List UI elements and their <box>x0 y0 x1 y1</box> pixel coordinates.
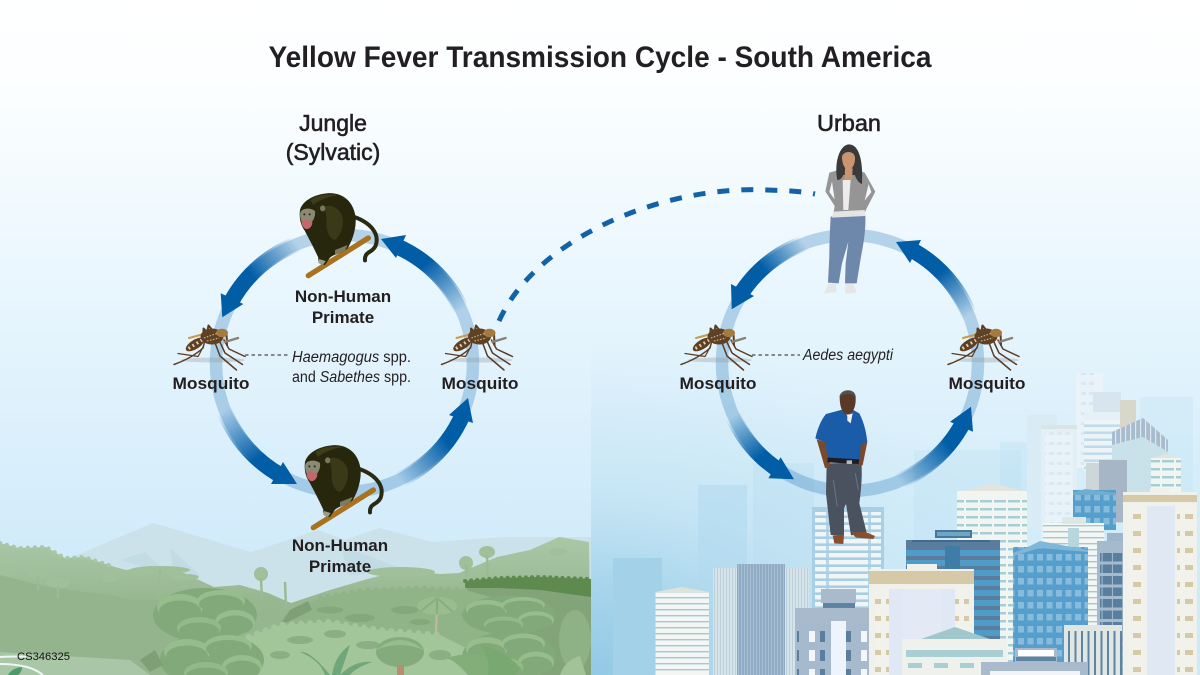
palm <box>417 597 457 633</box>
arrow: man to right mosquito <box>875 407 973 488</box>
front grey roof building <box>981 648 1088 675</box>
foreground fern leaves <box>300 645 586 675</box>
chart: urban transmission ring <box>722 235 978 491</box>
title: Yellow Fever Transmission Cycle - South America <box>268 41 932 74</box>
white mid-rise <box>1043 517 1104 643</box>
light blue tower behind man <box>812 507 884 647</box>
arrow: right mosquito to primate <box>381 235 470 333</box>
icon: man <box>815 390 875 544</box>
white teal-striped building <box>957 483 1027 675</box>
label: lower non-human primate: Primate <box>309 557 371 576</box>
icon: mosquito, jungle right <box>442 326 512 370</box>
illustration: city skyline <box>613 373 1197 675</box>
low building with teal roof <box>902 627 1007 675</box>
cream corner tower <box>1123 488 1197 675</box>
credit: figure code: CS346325 <box>17 651 70 663</box>
pale towers <box>1027 373 1136 545</box>
ground and stream <box>0 652 150 675</box>
panel: background sky, jungle half <box>0 0 591 675</box>
blue glass tower <box>1013 541 1088 675</box>
illustration: jungle landscape <box>0 523 591 675</box>
heading: jungle cycle: (Sylvatic) <box>286 139 380 165</box>
heading: urban cycle: Urban <box>817 110 881 136</box>
low vertical-striped building <box>1064 625 1122 675</box>
faint distant buildings <box>613 397 1193 675</box>
arrow: woman to left mosquito <box>731 236 835 309</box>
label: upper non-human primate: Non-Human <box>295 287 391 306</box>
arrow: dashed spillover path from jungle to urban <box>499 190 815 321</box>
dark canopy band <box>465 577 591 675</box>
label: lower non-human primate: Non-Human <box>292 536 388 555</box>
chart: jungle transmission ring <box>216 235 473 492</box>
arrow: left mosquito to lower primate <box>217 385 297 484</box>
grey tower with dark windows <box>1097 533 1162 675</box>
label: mosquito, jungle left: Mosquito <box>172 374 250 393</box>
arrow: primate to left mosquito <box>221 236 330 317</box>
mid canopy <box>225 588 540 675</box>
icon: mosquito, urban left <box>681 326 752 370</box>
callout: jungle mosquito species <box>245 349 411 386</box>
callout: jungle mosquito species: Haemagogus spp. <box>292 349 411 366</box>
icon: mosquito, urban right <box>948 326 1019 370</box>
small white building <box>656 587 709 675</box>
icon: woman <box>824 144 875 294</box>
label: mosquito, jungle right: Mosquito <box>442 374 518 393</box>
back tree line <box>0 537 591 675</box>
heading: jungle cycle: Jungle <box>299 110 367 136</box>
callout: urban mosquito species: Aedes aegypti <box>802 347 893 364</box>
label: upper non-human primate: Primate <box>312 308 374 327</box>
label: mosquito, urban right: Mosquito <box>948 374 1026 393</box>
grey low-rise with windows <box>795 589 869 675</box>
grey and teal mid-rise cluster <box>1086 418 1181 523</box>
icon: mosquito, jungle left <box>174 326 245 370</box>
large trees <box>140 588 556 675</box>
skyscraper group: grey striped <box>713 564 809 675</box>
blue mid-rise <box>1073 489 1116 530</box>
distant mountains <box>60 523 591 640</box>
icon: monkey, upper jungle <box>300 193 377 276</box>
arrow: right mosquito to woman <box>896 240 975 333</box>
arrow: lower primate to right mosquito <box>370 398 473 490</box>
label: mosquito, urban left: Mosquito <box>680 374 756 393</box>
callout: jungle mosquito species: and Sabethes spp. <box>292 369 411 386</box>
arrow: left mosquito to man <box>722 375 794 479</box>
flat-top trees and palms <box>0 546 567 588</box>
dark blue banded building <box>906 530 1000 640</box>
cream office block <box>869 564 974 675</box>
icon: monkey, lower jungle <box>305 445 382 528</box>
panel: background sky, urban half <box>591 0 1200 675</box>
